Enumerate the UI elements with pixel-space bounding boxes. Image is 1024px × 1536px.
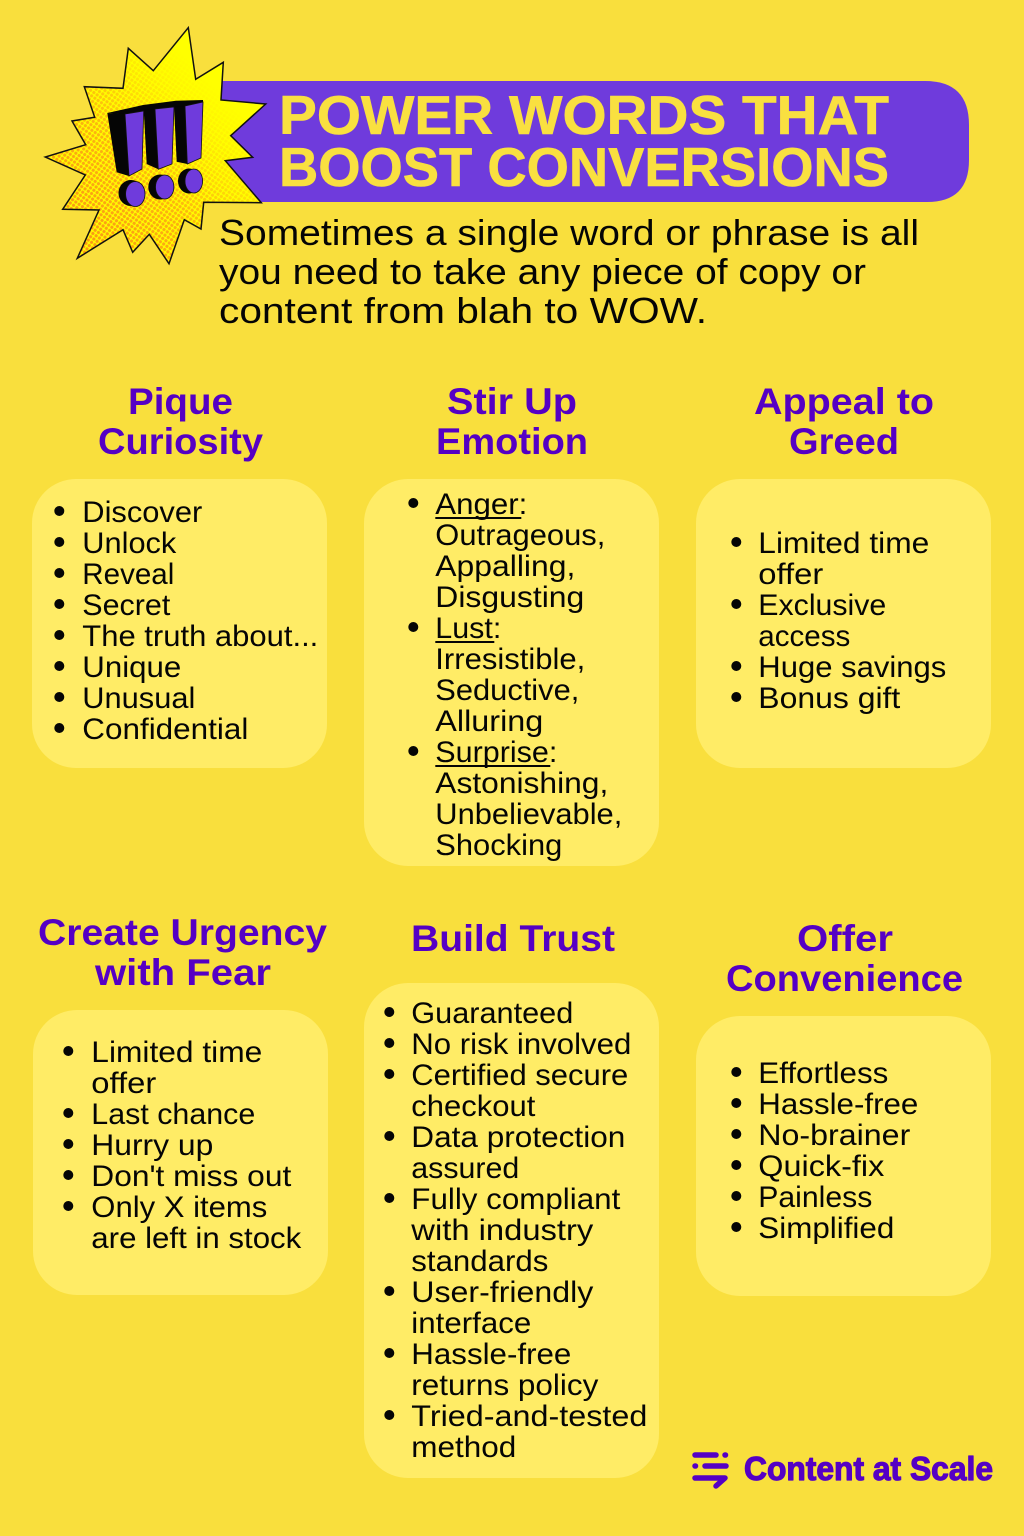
intro text (219, 212, 919, 331)
list: Pique Curiosity: Unusual (82, 682, 195, 715)
list: Offer Convenience: Simplified (758, 1212, 894, 1245)
list: Create Urgency with Fear: Only X items (91, 1191, 267, 1224)
card: Build Trust (364, 983, 659, 1478)
icon: logo mark (695, 1455, 726, 1486)
list: Build Trust: User-friendly (411, 1276, 593, 1309)
list: Appeal to Greed: access (758, 620, 850, 653)
heading: Appeal to Greed: Appeal to (754, 381, 934, 422)
list: Pique Curiosity: Secret (82, 589, 171, 622)
list: Create Urgency with Fear: are left in stock (91, 1222, 302, 1255)
list: Stir Up Emotion: Astonishing, (435, 767, 608, 800)
list: Build Trust: method (411, 1431, 516, 1464)
logo wordmark: Content at Scale (744, 1450, 993, 1487)
list: Stir Up Emotion: Seductive, (435, 674, 579, 707)
list: Offer Convenience: Effortless (758, 1057, 888, 1090)
heading: Offer Convenience: Convenience (726, 958, 963, 999)
heading: Pique Curiosity (98, 381, 263, 462)
heading: Appeal to Greed: Greed (789, 421, 899, 462)
panel: Pique Curiosity (32, 381, 327, 768)
list: Appeal to Greed: Bonus gift (758, 682, 901, 715)
list: Offer Convenience: Quick-fix (758, 1150, 884, 1183)
list: Stir Up Emotion: Unbelievable, (435, 798, 622, 831)
list: Stir Up Emotion (408, 488, 622, 862)
heading: Pique Curiosity: Curiosity (98, 421, 263, 462)
list: Appeal to Greed: Limited time (758, 527, 929, 560)
list: Build Trust: returns policy (411, 1369, 598, 1402)
list: Pique Curiosity: Discover (82, 496, 202, 529)
list: Appeal to Greed: Exclusive (758, 589, 886, 622)
heading: Create Urgency with Fear (38, 912, 327, 993)
heading: Build Trust: Build Trust (411, 918, 615, 959)
list: Create Urgency with Fear (63, 1036, 302, 1255)
list: Build Trust: Tried-and-tested (411, 1400, 647, 1433)
list: Appeal to Greed (731, 527, 946, 715)
list: Pique Curiosity: Reveal (82, 558, 174, 591)
heading: Pique Curiosity: Pique (128, 381, 233, 422)
panel: Appeal to Greed (696, 381, 991, 768)
list: Build Trust: assured (411, 1152, 519, 1185)
intro text: content from blah to WOW. (219, 290, 707, 331)
panel: Build Trust (364, 918, 659, 1478)
card: Stir Up Emotion (364, 479, 659, 866)
heading: Offer Convenience: Offer (797, 918, 893, 959)
heading: Offer Convenience (726, 918, 963, 999)
list: Pique Curiosity: The truth about... (82, 620, 318, 653)
card: Create Urgency with Fear (33, 1010, 328, 1295)
title: BOOST CONVERSIONS (279, 136, 889, 198)
heading: Stir Up Emotion (436, 381, 588, 462)
list: Stir Up Emotion: Outrageous, (435, 519, 605, 552)
intro text: you need to take any piece of copy or (219, 251, 866, 292)
list: Build Trust: checkout (411, 1090, 536, 1123)
list: Build Trust: interface (411, 1307, 531, 1340)
heading: Stir Up Emotion: Emotion (436, 421, 588, 462)
list: Stir Up Emotion: Disgusting (435, 581, 584, 614)
card: Pique Curiosity (32, 479, 327, 768)
list: Create Urgency with Fear: offer (91, 1067, 156, 1100)
list: Build Trust: Guaranteed (411, 997, 573, 1030)
list: Pique Curiosity: Unlock (82, 527, 177, 560)
list: Pique Curiosity (54, 496, 318, 746)
list: Stir Up Emotion: Irresistible, (435, 643, 585, 676)
list: Build Trust: Hassle-free (411, 1338, 571, 1371)
list: Offer Convenience (731, 1057, 918, 1245)
list: Build Trust: Data protection (411, 1121, 625, 1154)
list: Offer Convenience: No-brainer (758, 1119, 910, 1152)
header banner (200, 81, 969, 202)
logo: Content at Scale (695, 1450, 993, 1487)
list: Build Trust: standards (411, 1245, 548, 1278)
icon: comic burst with exclamation marks (45, 28, 266, 264)
list: Offer Convenience: Hassle-free (758, 1088, 918, 1121)
heading: Stir Up Emotion: Stir Up (447, 381, 577, 422)
list: Build Trust: Certified secure (411, 1059, 628, 1092)
list: Stir Up Emotion: Alluring (435, 705, 543, 738)
list: Stir Up Emotion: Shocking (435, 829, 562, 862)
panel: Create Urgency with Fear (33, 912, 328, 1295)
list: Build Trust: Fully compliant (411, 1183, 621, 1216)
title: POWER WORDS THAT (279, 84, 889, 146)
list: Create Urgency with Fear: Don't miss out (91, 1160, 292, 1193)
panel: Stir Up Emotion (364, 381, 659, 866)
heading: Create Urgency with Fear: with Fear (94, 952, 271, 993)
list: Offer Convenience: Painless (758, 1181, 872, 1214)
intro text: Sometimes a single word or phrase is all (219, 212, 919, 253)
list: Pique Curiosity: Unique (82, 651, 181, 684)
card: Offer Convenience (696, 1016, 991, 1296)
list: Appeal to Greed: offer (758, 558, 823, 591)
list: Pique Curiosity: Confidential (82, 713, 248, 746)
list: Stir Up Emotion: Lust: (435, 612, 501, 645)
list: Build Trust: No risk involved (411, 1028, 631, 1061)
list: Build Trust (384, 997, 647, 1464)
heading: Create Urgency with Fear: Create Urgency (38, 912, 327, 953)
list: Create Urgency with Fear: Hurry up (91, 1129, 213, 1162)
list: Stir Up Emotion: Surprise: (435, 736, 557, 769)
list: Stir Up Emotion: Appalling, (435, 550, 575, 583)
title (279, 84, 889, 198)
card: Appeal to Greed (696, 479, 991, 768)
panel: Offer Convenience (696, 918, 991, 1296)
list: Appeal to Greed: Huge savings (758, 651, 946, 684)
list: Create Urgency with Fear: Last chance (91, 1098, 255, 1131)
list: Build Trust: with industry (410, 1214, 593, 1247)
heading: Appeal to Greed (754, 381, 934, 462)
list: Stir Up Emotion: Anger: (435, 488, 527, 521)
list: Create Urgency with Fear: Limited time (91, 1036, 262, 1069)
